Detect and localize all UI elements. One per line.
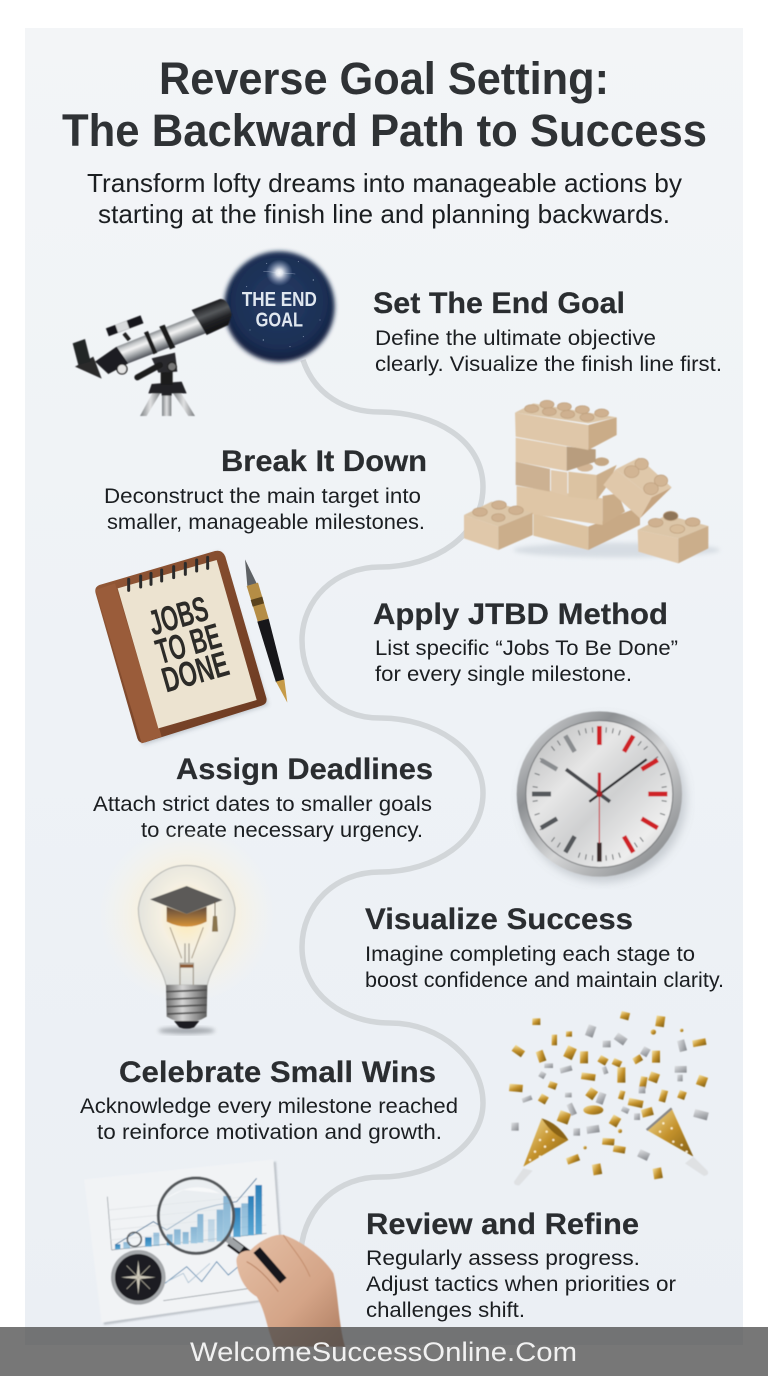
gold confetti bbox=[509, 1011, 708, 1179]
step 4 text bbox=[93, 753, 433, 842]
step 2 text bbox=[104, 445, 427, 534]
minute ticks bbox=[533, 727, 667, 861]
description bbox=[93, 793, 432, 842]
description: Define the ultimate objective bbox=[375, 327, 656, 350]
description: smaller, manageable milestones. bbox=[107, 511, 425, 534]
description: to reinforce motivation and growth. bbox=[97, 1121, 442, 1144]
heading: Break It Down bbox=[221, 445, 427, 478]
winding path bbox=[301, 360, 483, 1250]
footer text: WelcomeSuccessOnline.Com bbox=[190, 1337, 577, 1367]
heading: Set The End Goal bbox=[373, 287, 625, 320]
small right brick bbox=[638, 511, 708, 563]
title: Reverse Goal Setting: bbox=[159, 53, 609, 104]
right party horn bbox=[647, 1108, 708, 1176]
description bbox=[104, 485, 425, 534]
subtitle: starting at the finish line and planning backwards. bbox=[98, 199, 670, 229]
clock hands bbox=[566, 759, 647, 843]
heading: Visualize Success bbox=[365, 903, 633, 936]
step 5 text bbox=[365, 903, 724, 992]
description bbox=[80, 1095, 458, 1144]
sphere: the end goal: GOAL bbox=[256, 309, 303, 332]
tilted brick bbox=[603, 458, 672, 518]
sphere: the end goal: THE END bbox=[242, 288, 317, 311]
icon: light bulb with graduation cap bbox=[98, 827, 275, 1034]
description: challenges shift. bbox=[366, 1299, 525, 1322]
step 1 text bbox=[373, 287, 722, 376]
description: List specific “Jobs To Be Done” bbox=[375, 637, 678, 660]
footer banner bbox=[0, 1327, 768, 1376]
description: clearly. Visualize the finish line first. bbox=[375, 353, 722, 376]
heading: Review and Refine bbox=[366, 1208, 639, 1241]
magnifying glass bbox=[158, 1178, 283, 1281]
left party horn bbox=[514, 1118, 568, 1185]
subtitle bbox=[87, 168, 682, 229]
notebook label: TO BE bbox=[152, 616, 225, 672]
chart paper bbox=[84, 1159, 285, 1325]
icon: confetti and party horns bbox=[509, 1011, 709, 1185]
icon: wall clock bbox=[517, 711, 686, 882]
heading: Celebrate Small Wins bbox=[119, 1056, 436, 1089]
step 6 text bbox=[80, 1056, 458, 1144]
notebook label: DONE bbox=[158, 644, 233, 700]
icon: wooden bricks bbox=[464, 400, 720, 563]
telescope body bbox=[73, 299, 232, 379]
description: Attach strict dates to smaller goals bbox=[93, 793, 432, 816]
subtitle: Transform lofty dreams into manageable actions by bbox=[87, 168, 682, 198]
icon: telescope and end goal sphere bbox=[73, 251, 335, 416]
sphere: the end goal bbox=[224, 251, 335, 362]
heading: Assign Deadlines bbox=[176, 753, 433, 786]
hour marks bbox=[532, 726, 667, 862]
screw base bbox=[166, 985, 207, 1029]
step 7 text bbox=[366, 1208, 676, 1322]
description: Deconstruct the main target into bbox=[104, 485, 421, 508]
description bbox=[375, 327, 722, 376]
icon: chart, magnifier, compass and hand bbox=[84, 1159, 345, 1347]
pen bbox=[245, 559, 287, 703]
description bbox=[366, 1247, 676, 1322]
compass bbox=[111, 1232, 166, 1305]
heading: Apply JTBD Method bbox=[373, 598, 668, 631]
description: boost confidence and maintain clarity. bbox=[365, 969, 724, 992]
description bbox=[375, 637, 678, 686]
notebook label bbox=[144, 589, 233, 700]
description: Acknowledge every milestone reached bbox=[80, 1095, 458, 1118]
notebook label: JOBS bbox=[144, 589, 213, 643]
silver confetti bbox=[511, 1024, 709, 1161]
description: for every single milestone. bbox=[375, 663, 632, 686]
step 3 text bbox=[373, 598, 678, 686]
title: The Backward Path to Success bbox=[62, 105, 707, 156]
graduation cap bbox=[150, 886, 223, 932]
small left brick bbox=[464, 501, 533, 550]
description bbox=[365, 943, 724, 992]
icon: notebook and pen bbox=[95, 551, 287, 745]
description: to create necessary urgency. bbox=[141, 819, 423, 842]
tripod bbox=[140, 370, 195, 416]
title bbox=[62, 53, 707, 156]
description: Adjust tactics when priorities or bbox=[366, 1273, 676, 1296]
description: Imagine completing each stage to bbox=[365, 943, 695, 966]
hand bbox=[236, 1235, 345, 1347]
description: Regularly assess progress. bbox=[366, 1247, 640, 1270]
